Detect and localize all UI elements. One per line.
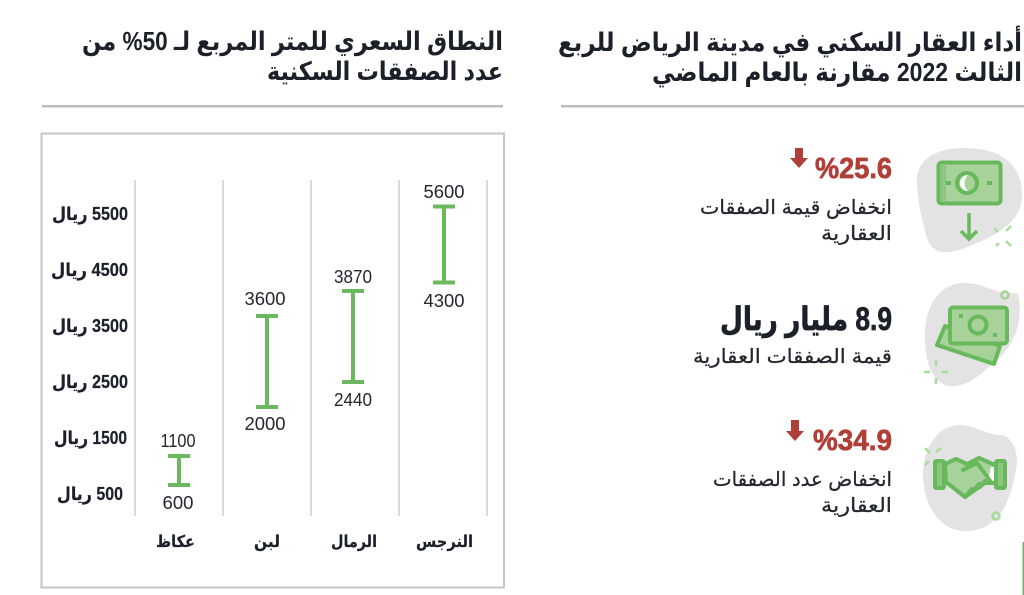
stat: transaction value decline: %25.6: [815, 153, 892, 185]
icon: banknote with down arrow: [917, 148, 1022, 252]
range: Laban: لبن: [254, 533, 280, 552]
heading: residential performance: الثالث 2022 مقارنة بالعام الماضي: [652, 59, 1022, 87]
y axis labels: 500 ريال: [57, 484, 123, 504]
range: Al Narjis: 5600: [424, 182, 464, 202]
y axis labels: [51, 204, 128, 504]
y axis labels: 4500 ريال: [51, 260, 128, 280]
range: Al Rimal: الرمال: [331, 533, 377, 552]
stat: total value: 8.9 مليار ريال: [720, 301, 892, 338]
range: Okaz: 1100: [160, 431, 196, 451]
range: Al Narjis: النرجس: [416, 533, 473, 552]
y axis labels: 2500 ريال: [52, 372, 128, 392]
range: Okaz: 600: [162, 493, 194, 513]
stat: transaction value decline: انخفاض قيمة الصفقات: [700, 197, 892, 219]
range: Okaz: عكاظ: [156, 533, 195, 551]
range: Al Rimal: 2440: [334, 390, 372, 410]
heading: price range: النطاق السعري للمتر المربع لـ 50% من: [82, 28, 503, 57]
stat: transaction value decline: العقارية: [821, 223, 892, 245]
stat: transaction value decline: [700, 148, 892, 245]
y axis labels: 3500 ريال: [52, 316, 128, 336]
stat: total value: [693, 301, 892, 368]
y axis labels: 5500 ريال: [52, 204, 128, 224]
stat: number of deals decline: [713, 420, 892, 517]
stat: total value: قيمة الصفقات العقارية: [693, 346, 892, 368]
range: Al Narjis: 4300: [424, 291, 464, 311]
range: Al Rimal: 3870: [334, 267, 372, 287]
icon: handshake: [923, 425, 1017, 531]
range: Okaz: [156, 431, 196, 551]
icon: stacked banknotes: [924, 283, 1020, 386]
icon: down arrow: [786, 420, 804, 441]
range: Laban: 2000: [244, 414, 286, 434]
y axis labels: 1500 ريال: [54, 428, 127, 448]
panel: price range chart: [42, 134, 504, 588]
stat: number of deals decline: %34.9: [813, 425, 892, 457]
stat: number of deals decline: العقارية: [821, 495, 892, 517]
stat: number of deals decline: انخفاض عدد الصفقات: [713, 469, 892, 491]
heading: price range: عدد الصفقات السكنية: [267, 58, 503, 86]
range: Al Rimal: [331, 267, 377, 552]
heading: price range: [82, 28, 503, 86]
range: Laban: [244, 289, 286, 552]
range: Al Narjis: [416, 182, 473, 552]
heading: residential performance: [558, 25, 1022, 87]
icon: down arrow: [790, 148, 808, 168]
range: Laban: 3600: [244, 289, 286, 309]
